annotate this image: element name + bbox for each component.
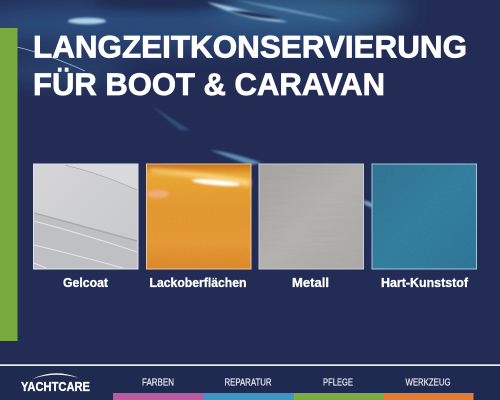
menu: Pflege <box>294 376 384 400</box>
title: FÜR BOOT & CARAVAN <box>33 66 385 102</box>
menu: Farben <box>113 376 204 400</box>
label: Hart-Kunststof: Hart-Kunststof <box>381 275 469 290</box>
title <box>33 28 467 102</box>
green accent bar <box>0 28 18 341</box>
label: Gelcoat: Gelcoat <box>63 275 109 290</box>
panel: Gelcoat swatch <box>34 164 138 269</box>
footer: navigation bar <box>0 364 500 400</box>
menu: Farben: FARBEN <box>142 376 174 388</box>
logo: Yachtcare <box>21 373 90 394</box>
menu: Werkzeug: WERKZEUG <box>406 376 450 388</box>
label: Lackoberflächen: Lackoberflächen <box>150 275 247 290</box>
label: Metall: Metall <box>292 275 329 290</box>
panel: Hart-Kunststoff swatch <box>372 164 476 269</box>
logo: Yachtcare: YACHTCARE <box>21 380 90 394</box>
panel: Lackoberflächen swatch <box>146 164 251 269</box>
title: LANGZEITKONSERVIERUNG <box>33 28 467 64</box>
menu: Pflege: PFLEGE <box>323 376 353 388</box>
menu: Werkzeug <box>384 376 474 400</box>
panel: Metall swatch <box>259 164 364 269</box>
menu: Reparatur: REPARATUR <box>224 376 272 388</box>
menu: Reparatur <box>204 376 294 400</box>
